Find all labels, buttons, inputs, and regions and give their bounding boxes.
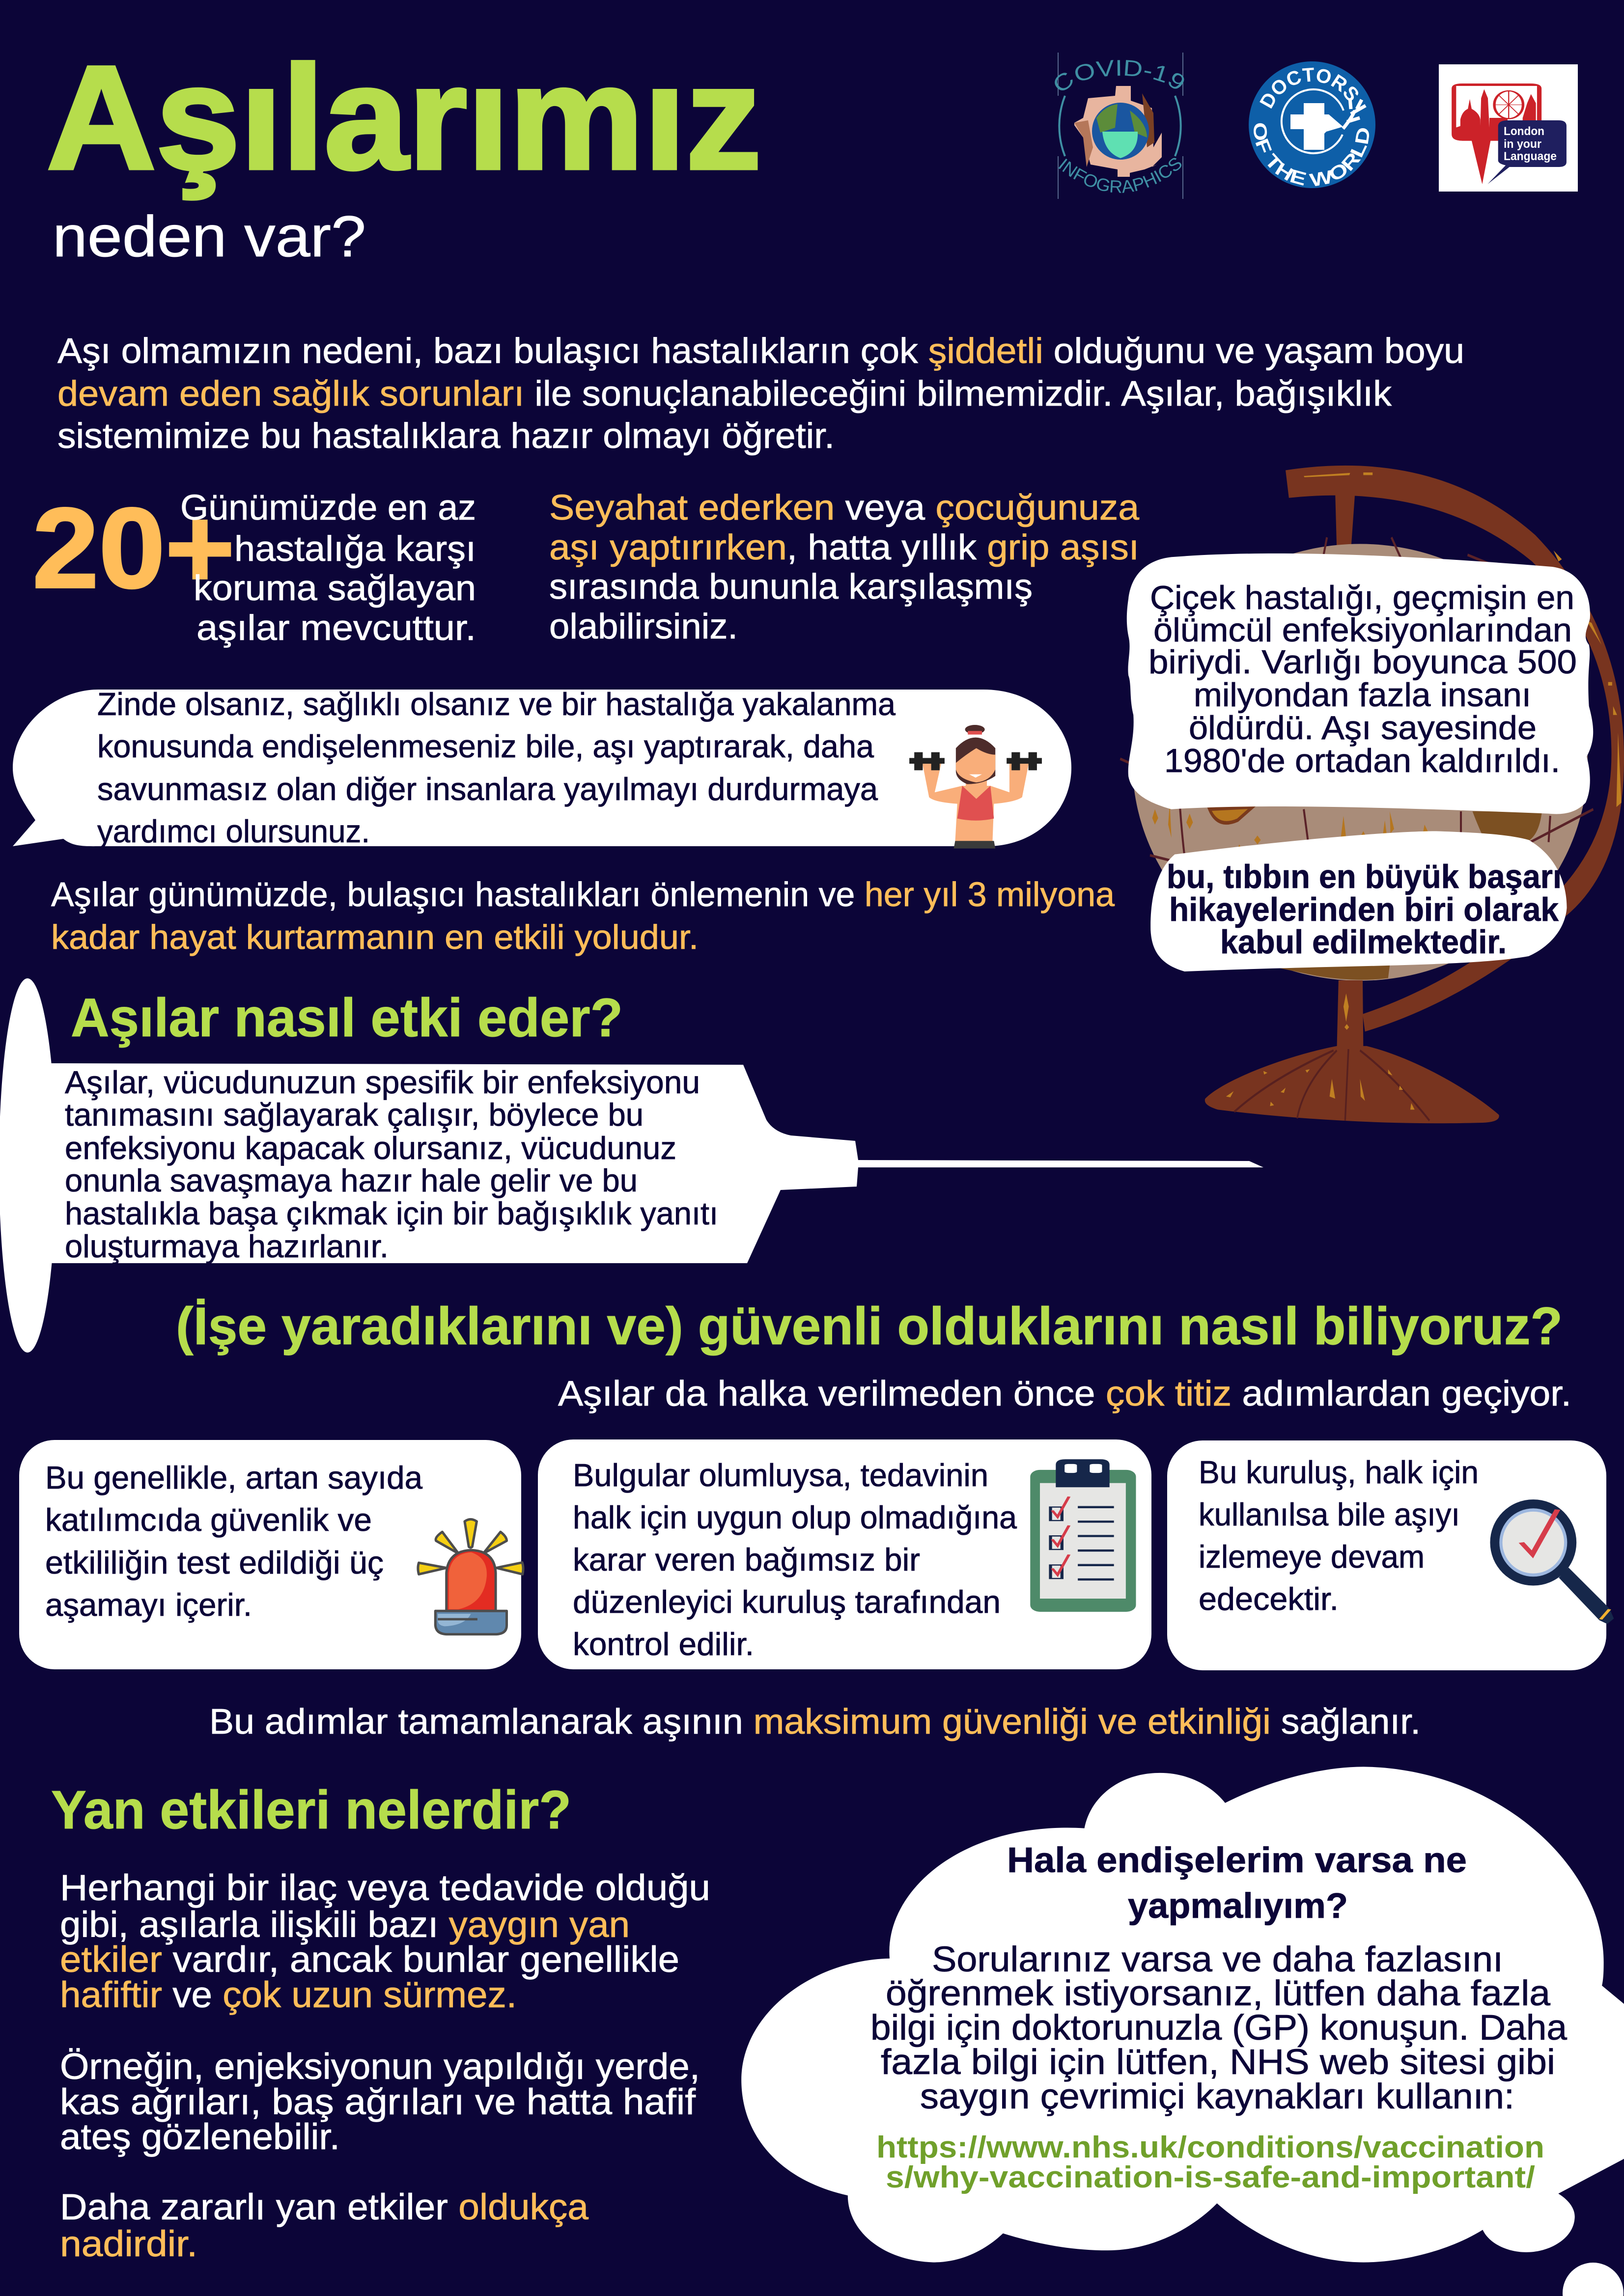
logo: London in your Language: London [1504, 125, 1544, 138]
text: most effective way [51, 875, 1115, 956]
speech bubble text: konusunda endişelenmeseniz bile, aşı yaptırarak, daha [97, 728, 874, 764]
cloud text: yapmalıyım? [1128, 1886, 1348, 1926]
text: rigorous steps: Aşılar da halka verilmeden önce çok titiz adımlardan geçiyor. [558, 1374, 1571, 1413]
text: side effects paragraphs: Örneğin, enjeksiyonun yapıldığı yerde, [60, 2046, 700, 2087]
travel text block: sırasında bununla karşılaşmış [549, 567, 1033, 607]
text: most effective way: kadar hayat kurtarmanın en etkili yoludur. [51, 918, 699, 956]
travel text block [549, 488, 1140, 646]
callout: success story text: bu, tıbbın en büyük başarı [1167, 858, 1562, 895]
callout: smallpox text: Çiçek hastalığı, geçmişin en [1150, 579, 1574, 616]
syringe text: onunla savaşmaya hazır hale gelir ve bu [65, 1162, 638, 1198]
icon: woman lifting dumbbells [909, 725, 1042, 849]
heading: side effects: Yan etkileri nelerdir? [51, 1780, 571, 1840]
icon: clipboard checklist [1030, 1459, 1136, 1612]
syringe text: oluşturmaya hazırlanır. [65, 1228, 389, 1264]
callout: success story text: hikayelerinden biri olarak [1169, 891, 1559, 928]
panel: regulator card: karar veren bağımsız bir [573, 1542, 920, 1577]
text: side effects paragraphs: etkiler vardır, ancak bunlar genellikle [60, 1939, 679, 1980]
panel: phases card: aşamayı içerir. [45, 1587, 252, 1623]
panel: regulator card [538, 1439, 1151, 1669]
logo: Doctors of the World: DOCTORS [1260, 68, 1359, 109]
callout: success story text [1167, 858, 1562, 961]
syringe text: tanımasını sağlayarak çalışır, böylece bu [65, 1097, 644, 1133]
cloud shape [741, 1767, 1624, 2262]
callout: smallpox text: öldürdü. Aşı sayesinde [1189, 709, 1537, 747]
logo: COVID-19 Infographics [1055, 53, 1184, 199]
logo: London in your Language: Language [1504, 150, 1557, 163]
text: most effective way: Aşılar günümüzde, bulaşıcı hastalıkları önlemenin ve her yıl 3 milyona [51, 875, 1115, 913]
illustration: antique globe [1120, 466, 1624, 1123]
text: side effects paragraphs [60, 1867, 710, 2264]
panel: phases card: katılımcıda güvenlik ve [45, 1502, 372, 1538]
speech bubble text: savunmasız olan diğer insanlara yayılmayı durdurmaya [97, 771, 878, 807]
cloud text: bilgi için doktorunuzla (GP) konuşun. Daha [870, 2008, 1568, 2047]
cloud text: Sorularınız varsa ve daha fazlasını [932, 1940, 1503, 1979]
stat: 20+: 20+ [32, 485, 235, 612]
intro paragraph: sistemimize bu hastalıklara hazır olmayı öğretir. [57, 416, 835, 456]
callout: success story text: kabul edilmektedir. [1220, 923, 1507, 961]
stat description: aşılar mevcuttur. [196, 609, 476, 648]
title: Aşılarımız [47, 35, 761, 201]
heading: how we know they are safe: (İşe yaradıklarını ve) güvenli olduklarını nasıl biliyoruz? [176, 1296, 1563, 1355]
text: side effects paragraphs: hafiftir ve çok uzun sürmez. [60, 1974, 517, 2015]
icon: siren [418, 1520, 523, 1634]
panel: regulator card: düzenleyici kuruluş tarafından [573, 1584, 1001, 1620]
panel: phases card: Bu genellikle, artan sayıda [45, 1460, 423, 1495]
cloud text: Hala endişelerim varsa ne [1007, 1841, 1467, 1880]
logo: London in your Language: in your [1504, 138, 1541, 151]
syringe text: hastalıkla başa çıkmak için bir bağışıklık yanıtı [65, 1195, 718, 1231]
speech bubble text: yardımcı olursunuz. [97, 813, 370, 849]
logo: Doctors of the World: OF THE WORLD [1254, 123, 1369, 186]
cloud text: https://www.nhs.uk/conditions/vaccination [876, 2130, 1544, 2164]
icon: magnifying glass [1490, 1499, 1614, 1624]
speech bubble text: Zinde olsanız, sağlıklı olsanız ve bir hastalığa yakalanma [97, 686, 896, 722]
text: side effects paragraphs: kas ağrıları, baş ağrıları ve hatta hafif [60, 2081, 696, 2122]
stat description [180, 488, 476, 648]
syringe text [65, 1064, 718, 1264]
logo: London in your Language [1439, 64, 1578, 192]
panel: regulator card: Bulgular olumluysa, tedavinin [573, 1457, 988, 1493]
text: side effects paragraphs: Daha zararlı yan etkiler oldukça [60, 2186, 589, 2227]
cloud text: öğrenmek istiyorsanız, lütfen daha fazla [886, 1974, 1551, 2013]
travel text block: aşı yaptırırken , hatta yıllık grip aşısı [549, 528, 1139, 567]
text: side effects paragraphs: gibi, aşılarla ilişkili bazı yaygın yan [60, 1904, 630, 1945]
panel: monitoring card [1167, 1440, 1614, 1670]
travel text block: olabilirsiniz. [549, 607, 738, 646]
panel: regulator card: kontrol edilir. [573, 1626, 754, 1662]
text: side effects paragraphs: nadirdir. [60, 2223, 197, 2264]
syringe shape [0, 978, 1263, 1353]
callout: smallpox text: 1980'de ortadan kaldırıldı. [1164, 742, 1560, 779]
speech bubble background [13, 690, 1071, 846]
cloud text [870, 1841, 1568, 2194]
stat description: Günümüzde en az [180, 488, 476, 527]
text: side effects paragraphs: ateş gözlenebilir. [60, 2116, 340, 2157]
logo: Doctors of the World [1249, 61, 1375, 188]
logo: COVID-19 Infographics: COVID-19 [1055, 60, 1184, 90]
syringe text: Aşılar, vücudunuzun spesifik bir enfeksiyonu [65, 1064, 700, 1100]
panel: monitoring card: kullanılsa bile aşıyı [1199, 1496, 1460, 1532]
callout: smallpox text background [1127, 553, 1593, 814]
panel: monitoring card: edecektir. [1199, 1581, 1339, 1617]
small thought bubble [1563, 2263, 1624, 2296]
travel text block: Seyahat ederken veya çocuğunuza [549, 488, 1140, 527]
callout: smallpox text [1148, 579, 1577, 779]
stat description: hastalığa karşı [234, 529, 476, 569]
intro paragraph: Aşı olmamızın nedeni, bazı bulaşıcı hastalıkların çok şiddetli olduğunu ve yaşam boyu [57, 332, 1464, 371]
cloud text: saygın çevrimiçi kaynakları kullanın: [920, 2077, 1514, 2116]
callout: smallpox text: milyondan fazla insanı [1194, 676, 1531, 714]
speech bubble text [97, 686, 896, 849]
panel: phases card [19, 1440, 523, 1669]
syringe text: enfeksiyonu kapacak olursanız, vücudunuz [65, 1130, 676, 1166]
panel: monitoring card: izlemeye devam [1199, 1539, 1425, 1575]
logo: COVID-19 Infographics: INFOGRAPHICS [1058, 158, 1182, 193]
callout: success story background [1150, 831, 1567, 971]
subtitle: neden var? [53, 204, 366, 269]
panel: monitoring card: Bu kuruluş, halk için [1199, 1454, 1479, 1490]
panel: regulator card: halk için uygun olup olmadığına [573, 1499, 1017, 1535]
text: maximum safety: Bu adımlar tamamlanarak aşının maksimum güvenliği ve etkinliği sağlanır. [209, 1702, 1421, 1742]
intro paragraph [57, 332, 1464, 456]
panel: phases card: etkililiğin test edildiği üç [45, 1545, 384, 1580]
callout: smallpox text: biriydi. Varlığı boyunca 500 [1148, 643, 1577, 681]
cloud text: s/why-vaccination-is-safe-and-important/ [886, 2160, 1535, 2194]
intro paragraph: devam eden sağlık sorunları ile sonuçlanabileceğini bilmemizdir. Aşılar, bağışıklık [57, 374, 1392, 414]
heading: how vaccines work: Aşılar nasıl etki eder? [71, 988, 623, 1048]
text: side effects paragraphs: Herhangi bir ilaç veya tedavide olduğu [60, 1867, 710, 1908]
stat description: koruma sağlayan [194, 569, 476, 608]
cloud text: fazla bilgi için lütfen, NHS web sitesi gibi [881, 2043, 1555, 2082]
callout: smallpox text: ölümcül enfeksiyonlarından [1153, 611, 1572, 649]
